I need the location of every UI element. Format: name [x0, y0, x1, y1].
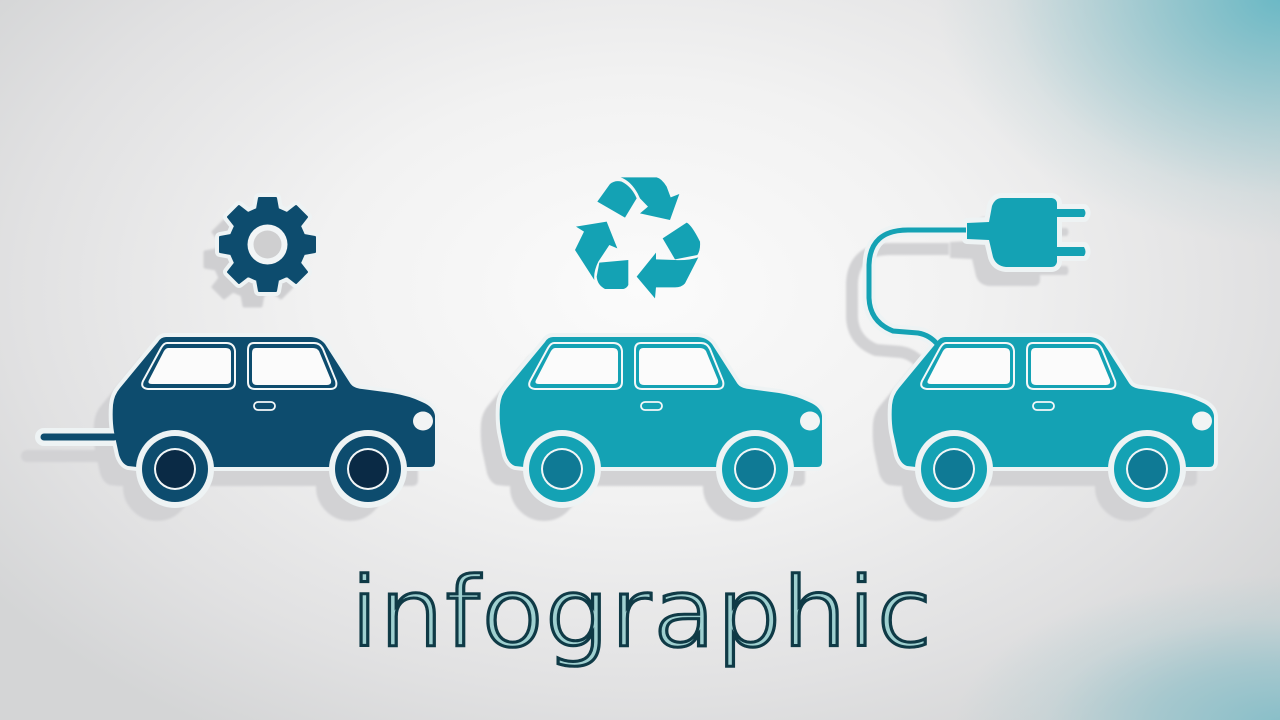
infographic artwork	[22, 177, 1218, 668]
title: infographic	[350, 556, 933, 671]
car 1: dark with exhaust	[27, 337, 435, 520]
car 3: teal electric with plug	[852, 198, 1214, 520]
icon: gear	[205, 198, 315, 306]
icon: recycling arrows	[575, 177, 700, 298]
car 2: teal hybrid	[482, 337, 822, 520]
